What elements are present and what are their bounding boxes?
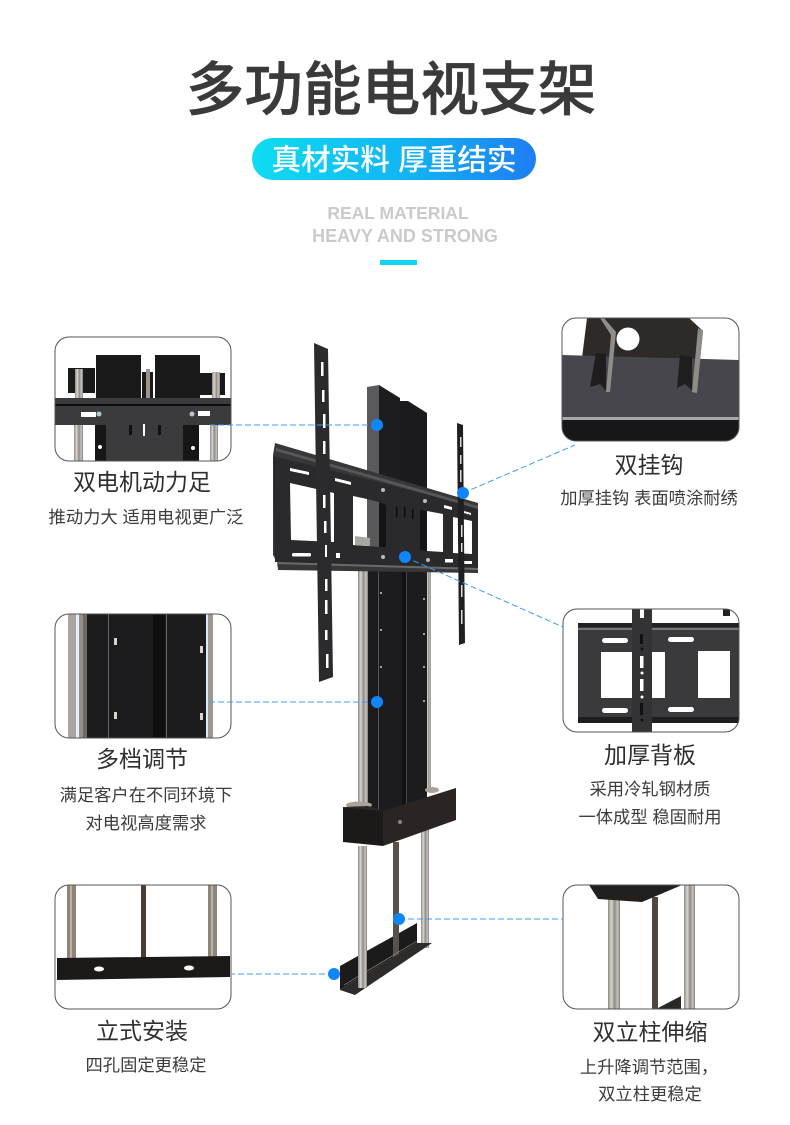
lifting rails upper: [358, 560, 431, 810]
description: multi-level adjust: [60, 785, 232, 833]
floor bracket base: [340, 941, 432, 995]
accent bar: [380, 260, 417, 265]
description: double hook: 加厚挂钩 表面喷涂耐绣: [560, 488, 738, 508]
heading: floor install: 立式安装: [96, 1018, 188, 1044]
subtitle pill: [252, 138, 536, 180]
connector lines: [210, 425, 575, 974]
panel: thick back plate: [563, 609, 739, 827]
thumbnail: dual column telescoping: [563, 885, 739, 1009]
thumbnail: multi-level adjust: [55, 614, 231, 738]
panel: dual column telescoping: [563, 885, 739, 1104]
description: dual column telescoping: 双立柱更稳定: [598, 1084, 702, 1104]
title: 多功能电视支架: [186, 58, 596, 123]
panel: dual motor: [49, 337, 243, 527]
panel: double hook: [560, 318, 739, 508]
marker dots: [328, 419, 469, 980]
heading: double hook: 双挂钩: [614, 452, 684, 478]
horizontal mounting plate: [273, 443, 478, 573]
heading: dual column telescoping: 双立柱伸缩: [592, 1019, 708, 1045]
floor bracket wall: [340, 923, 417, 990]
panel: multi-level adjust: [55, 614, 232, 833]
description: dual motor: 推动力大 适用电视更广泛: [49, 507, 243, 527]
description: dual column telescoping: 上升降调节范围，: [580, 1057, 718, 1077]
thumbnail: floor install: [55, 885, 231, 1009]
thumbnail: dual motor: [55, 337, 231, 461]
left vertical strip: [314, 343, 333, 682]
right vertical strip: [457, 423, 465, 645]
thumbnail: double hook: [562, 318, 739, 441]
front column: [367, 385, 427, 815]
description: thick back plate: [578, 779, 722, 827]
heading: thick back plate: 加厚背板: [604, 742, 696, 768]
heading: multi-level adjust: 多档调节: [96, 746, 188, 772]
english subtitle: [312, 203, 498, 246]
english subtitle: HEAVY AND STRONG: [312, 226, 498, 246]
right lower rail: [421, 830, 429, 948]
product: tv stand: [273, 343, 478, 995]
motor box: [343, 787, 456, 846]
description: multi-level adjust: 对电视高度需求: [86, 813, 206, 833]
heading: dual motor: 双电机动力足: [73, 469, 211, 495]
thumbnail: thick back plate: [563, 609, 739, 732]
description: floor install: 四孔固定更稳定: [86, 1055, 206, 1075]
subtitle pill: 真材实料 厚重结实: [272, 144, 516, 177]
rear column: [399, 401, 427, 810]
left lower rail: [358, 846, 367, 988]
description: dual column telescoping: [580, 1057, 718, 1104]
panel: floor install: [55, 885, 231, 1075]
description: multi-level adjust: 满足客户在不同环境下: [60, 785, 232, 805]
screw: [393, 842, 399, 958]
english subtitle: REAL MATERIAL: [327, 203, 469, 223]
description: thick back plate: 一体成型 稳固耐用: [578, 807, 722, 827]
description: thick back plate: 采用冷轧钢材质: [590, 779, 710, 799]
